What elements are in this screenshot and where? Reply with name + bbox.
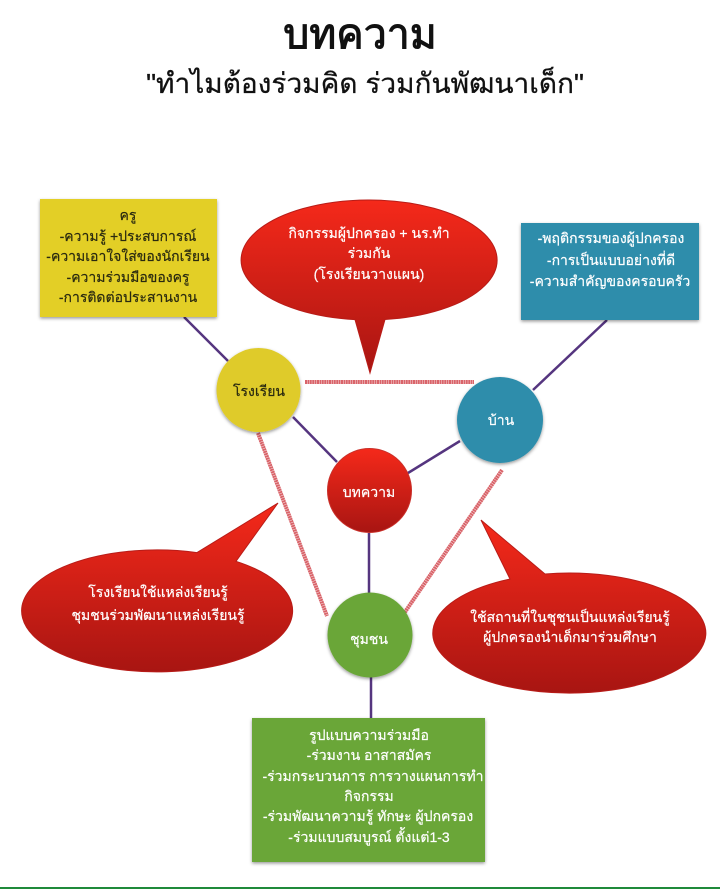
circle: school [216,348,300,432]
connector lines [184,317,607,718]
callout: top: กิจกรรมผู้ปกครอง + นร.ทำ [288,225,450,242]
panel: cooperation forms: -ร่วมกระบวนการ การวางแผนการทำ [262,768,484,784]
callout: top: ร่วมกัน [348,245,391,261]
callout: top [241,200,497,373]
callout: top: (โรงเรียนวางแผน) [314,266,424,282]
panel: teachers: -ความรู้ +ประสบการณ์ [60,228,196,245]
panel: cooperation forms: กิจกรรม [344,788,394,804]
callout: left: ชุมชนร่วมพัฒนาแหล่งเรียนรู้ [72,607,245,624]
panel: parents: -พฤติกรรมของผู้ปกครอง [538,230,684,247]
panel: parents [521,223,699,320]
panel: cooperation forms [252,718,485,862]
callout: left [22,503,293,672]
panel: cooperation forms: -ร่วมพัฒนาความรู้ ทักษะ ผู้ปกครอง [263,808,473,825]
callout: right: ใช้สถานที่ในชุชนเป็นแหล่งเรียนรู้ [470,608,670,626]
bottom green edge [0,887,720,889]
circle: community [328,592,412,678]
callout: right: ผู้ปกครองนำเด็กมาร่วมศึกษา [483,628,657,646]
panel: teachers: ครู [120,207,137,224]
circle: community: ชุมชน [350,631,388,648]
title: บทความ [283,11,437,57]
panel: parents: -การเป็นแบบอย่างที่ดี [547,251,675,268]
panel: teachers: -ความร่วมมือของครู [67,269,190,286]
panel: teachers: -ความเอาใจใส่ของนักเรียน [46,248,210,264]
panel: parents: -ความสำคัญของครอบครัว [530,273,690,289]
callout: left: โรงเรียนใช้แหล่งเรียนรู้ [88,584,228,601]
panel: teachers [40,199,217,317]
dashed partnership links [258,382,502,616]
circle: article [328,448,412,532]
panel: cooperation forms: -ร่วมงาน อาสาสมัคร [307,747,432,763]
circle: home: บ้าน [488,412,515,428]
subtitle: "ทำไมต้องร่วมคิด ร่วมกันพัฒนาเด็ก" [146,66,584,99]
circle: school: โรงเรียน [233,383,285,399]
panel: teachers: -การติดต่อประสานงาน [59,289,198,305]
circle: article: บทความ [343,484,395,500]
panel: cooperation forms: -ร่วมแบบสมบูรณ์ ตั้งแต่1-3 [288,827,450,846]
circle: home [457,377,543,463]
panel: cooperation forms: รูปแบบความร่วมมือ [309,727,429,744]
callout: right [433,520,706,693]
